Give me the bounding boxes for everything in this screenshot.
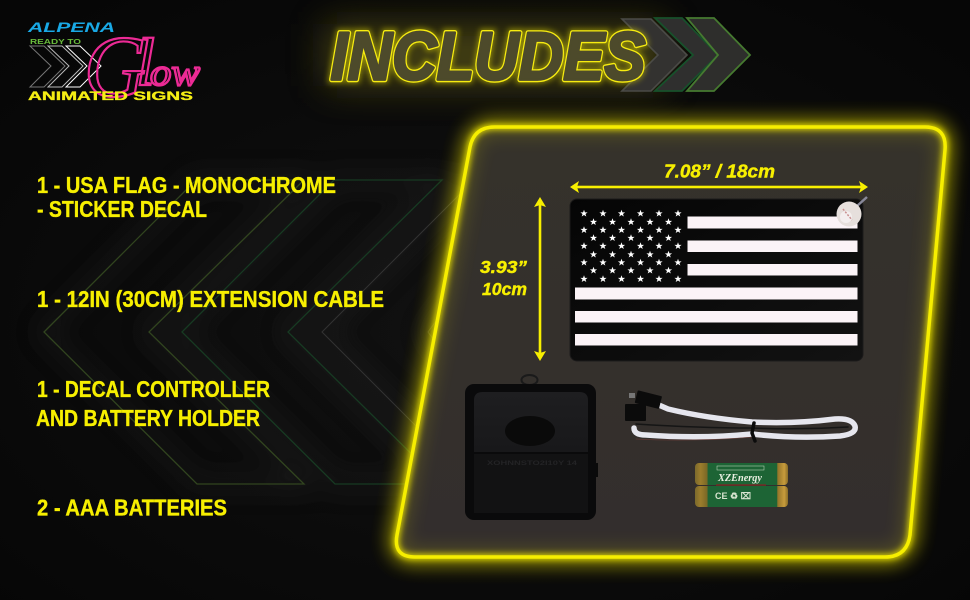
item: controller and holder (36, 376, 270, 431)
cable ribbon (634, 402, 855, 440)
logo chevrons (30, 46, 101, 87)
logo tagline: ready to: READY TO (30, 39, 82, 46)
decal controller and battery holder (465, 375, 598, 520)
logo script: Glow (84, 19, 201, 116)
height arrow (534, 197, 546, 361)
cable connectors (625, 390, 662, 421)
title: INCLUDES: INCLUDES (330, 18, 646, 94)
item: USA flag decal (37, 172, 336, 222)
sticker seal (836, 197, 867, 226)
height dimension label: 3.93” (480, 257, 527, 277)
logo subtitle: animated signs: ANIMATED SIGNS (28, 91, 194, 103)
item: controller and holder: AND BATTERY HOLDER (36, 405, 260, 431)
title: INCLUDES: INCLUDES (330, 18, 646, 94)
background chevrons (44, 180, 540, 484)
battery label (717, 466, 764, 470)
logo script: Glow: G (84, 19, 146, 116)
item: batteries: 2 - AAA BATTERIES (37, 494, 227, 520)
battery brand: XZEnergy (717, 473, 763, 484)
item: USA flag decal: - STICKER DECAL (37, 196, 207, 222)
height dimension label: 10cm (482, 279, 527, 299)
width arrow (570, 181, 868, 193)
logo script: Glow: ow (150, 52, 201, 94)
panel: product neon frame (396, 127, 945, 557)
extension cable (625, 390, 855, 441)
logo: Alpena Ready to Glow Animated Signs (26, 19, 201, 116)
USA flag sticker decal (570, 197, 867, 361)
cable tie (752, 423, 755, 441)
title glow backdrop (325, 24, 665, 86)
item: extension cable: 1 - 12IN (30CM) EXTENSION CABLE (37, 286, 384, 312)
flag stripes (575, 216, 858, 346)
height dimension label (480, 257, 527, 299)
logo script: Glow: l (136, 24, 155, 100)
title: INCLUDES: INCLUDES (330, 18, 646, 94)
list: included items (36, 172, 384, 520)
battery markings: CE ♻ ⌧ (715, 491, 751, 501)
item: USA flag decal: 1 - USA FLAG - MONOCHROME (37, 172, 336, 198)
title chevrons (622, 18, 750, 91)
width dimension label: 7.08” / 18cm (664, 162, 775, 182)
flag stars (580, 210, 682, 282)
controller mould markings: XOHNNSTO2I10Y 14 (487, 460, 578, 467)
item: controller and holder: 1 - DECAL CONTROLLER (37, 376, 270, 402)
AAA batteries (695, 463, 788, 507)
logo wordmark: Alpena: ALPENA (26, 19, 115, 35)
